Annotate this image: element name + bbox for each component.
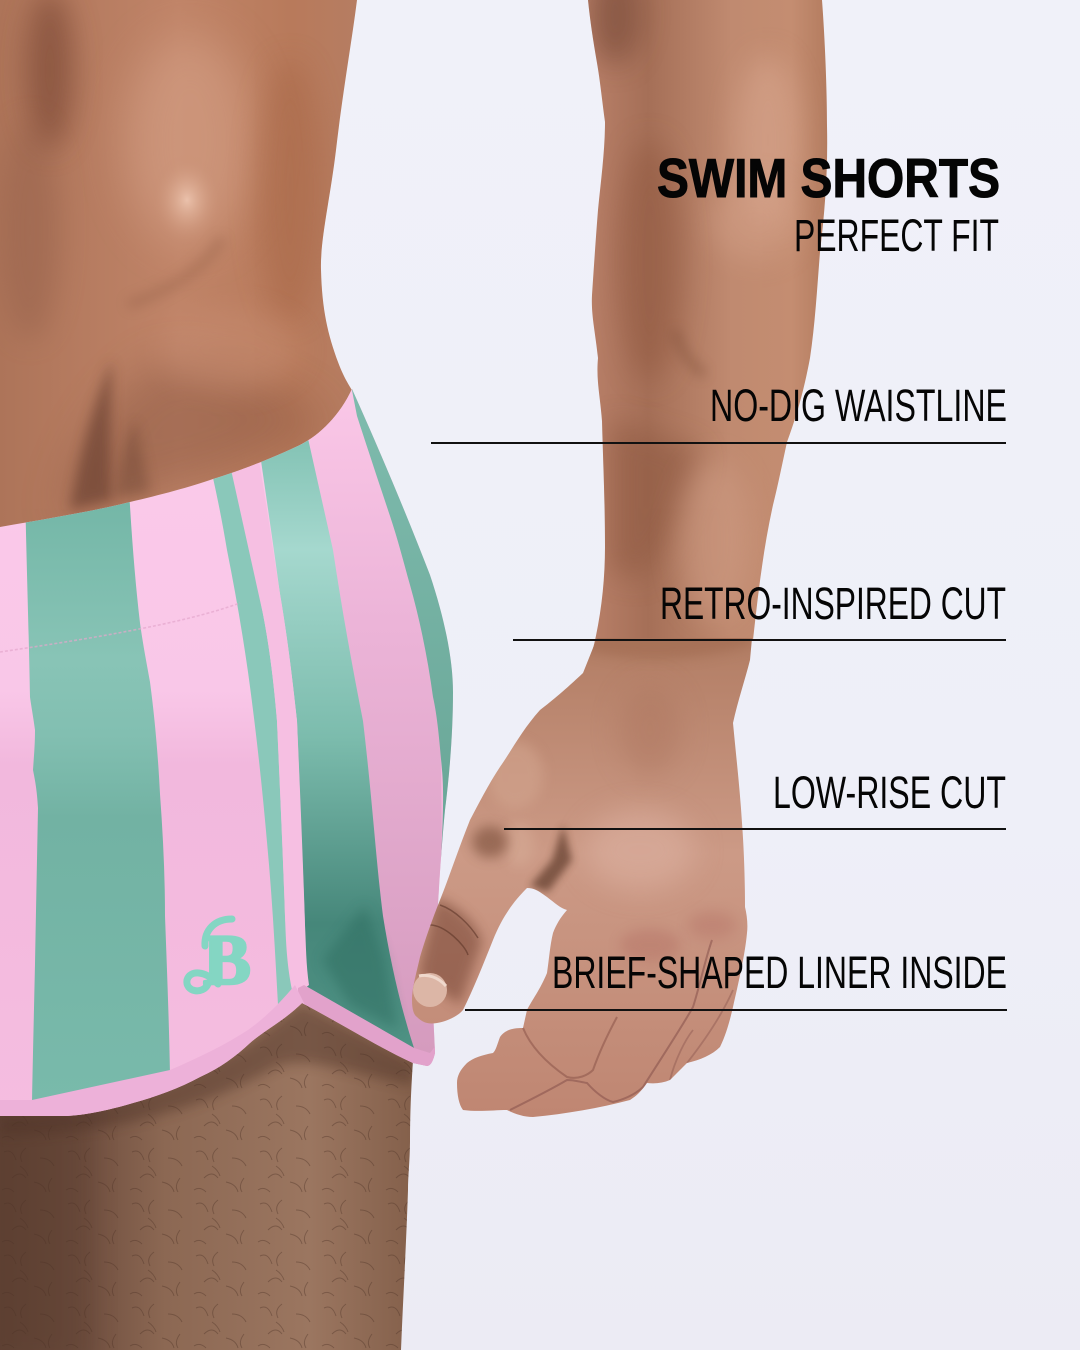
logo: script B: B [203, 920, 251, 1000]
torso [0, 0, 357, 570]
muscle groove [675, 330, 705, 375]
right hem binding [298, 985, 435, 1066]
front waistband stitching [0, 603, 240, 652]
center green stripe [258, 425, 414, 1048]
pink base panel [0, 380, 460, 1120]
right orange side [258, 60, 322, 320]
lower abdomen shade [66, 359, 317, 512]
lower light [674, 466, 740, 610]
outer green stripe [352, 389, 453, 857]
leg with hair [0, 1000, 420, 1350]
wrist shading [591, 638, 752, 658]
lower dark band [610, 420, 700, 580]
thumbnail [413, 973, 447, 1007]
hand [412, 630, 752, 1117]
top dark [589, 0, 641, 65]
groove V [70, 360, 112, 510]
subheading: perfect fit: PERFECT FIT [794, 210, 999, 261]
upper forearm light [736, 62, 802, 208]
heading: swim shorts: SWIM SHORTS [657, 147, 1000, 209]
back of hand highlight [585, 810, 695, 890]
muscle crease [128, 238, 222, 305]
dark left muscle [618, 140, 682, 380]
left green stripe [25, 470, 170, 1102]
chest sheen [125, 35, 255, 245]
thumb web shadow [530, 825, 572, 892]
arm [588, 0, 827, 660]
left hem binding [0, 985, 305, 1122]
left dark band [26, 0, 74, 150]
shadow under hem [0, 1003, 413, 1135]
knuckles [622, 930, 678, 960]
swim shorts [0, 380, 470, 1122]
thumb tip [418, 898, 482, 1005]
thumb knuckle shadow [472, 826, 508, 858]
side binding [230, 455, 309, 992]
center dark fold [326, 913, 400, 1026]
narrow green stripe [213, 472, 292, 1004]
finger separations [523, 1017, 617, 1078]
right pink panel [300, 380, 445, 1070]
